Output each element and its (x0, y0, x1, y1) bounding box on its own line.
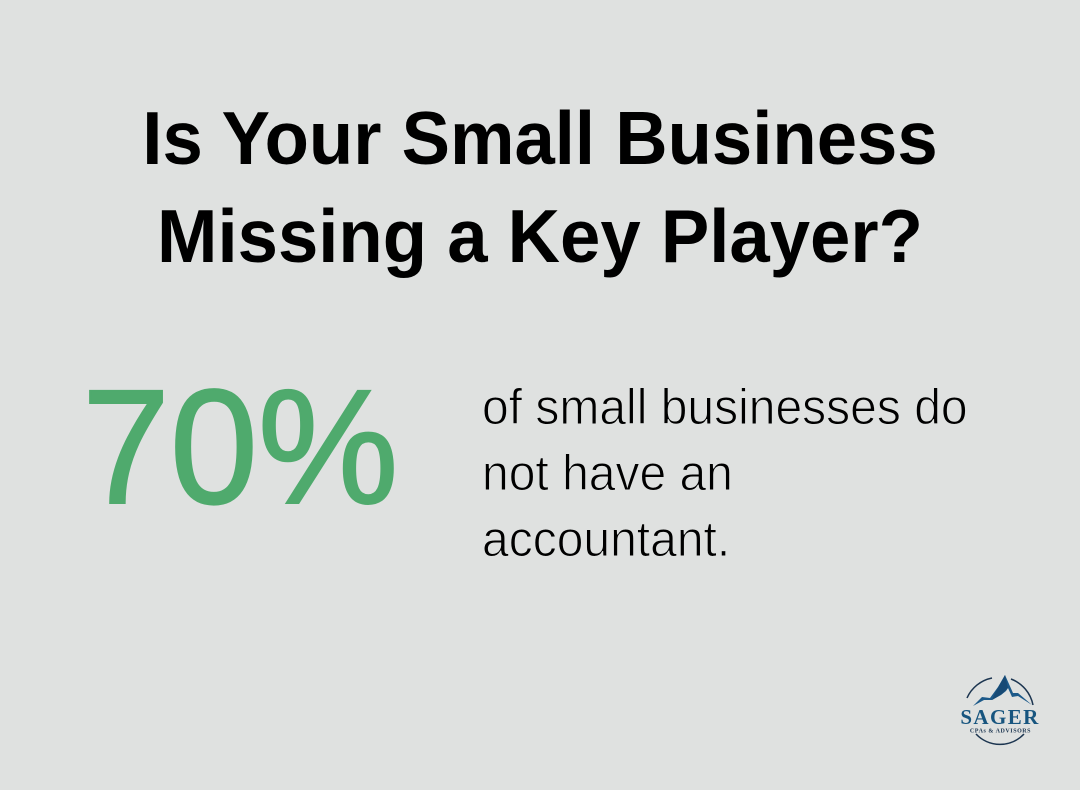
description text: of small businesses do (482, 379, 968, 435)
title (142, 96, 938, 278)
logo tagline: CPAs & ADVISORS (970, 728, 1031, 734)
description text: not have an (482, 445, 733, 501)
logo name: SAGER (960, 705, 1040, 729)
logo (960, 675, 1040, 746)
title: Is Your Small Business (142, 96, 938, 180)
description text (482, 379, 968, 567)
description text: accountant. (482, 511, 730, 567)
title: Missing a Key Player? (157, 194, 923, 278)
icon: mountain (973, 675, 1032, 706)
big statistic: 70% (82, 354, 398, 538)
icon: logo ring (967, 678, 1033, 744)
